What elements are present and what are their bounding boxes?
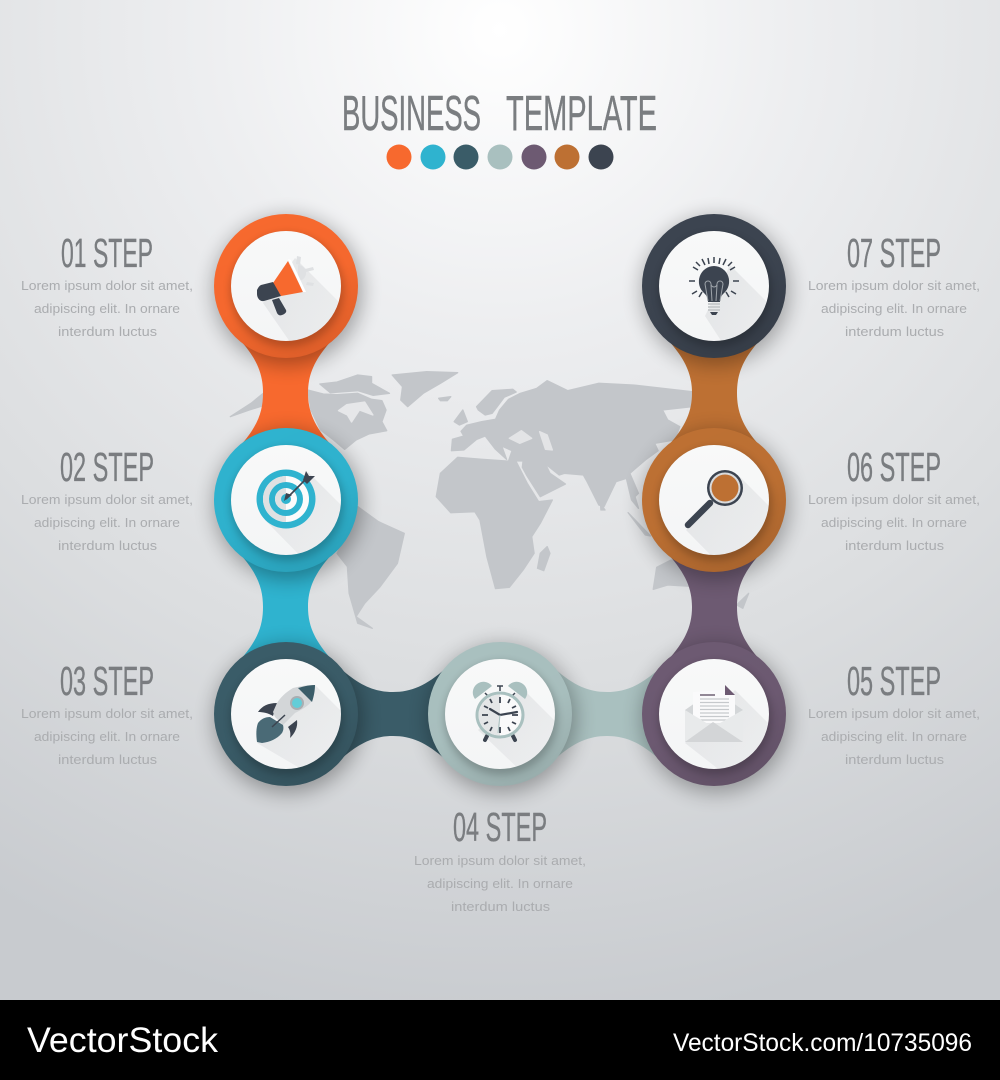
step 04 text: interdum luctus	[451, 899, 551, 914]
node 03 rocket	[214, 642, 375, 793]
africa	[436, 457, 552, 589]
icon: envelope	[685, 685, 743, 742]
step 04 text: Lorem ipsum dolor sit amet,	[414, 853, 586, 868]
footer banner	[0, 1000, 1000, 1080]
step 03 text: Lorem ipsum dolor sit amet,	[21, 706, 193, 721]
node 07 light bulb	[642, 214, 790, 370]
step 06 text: adipiscing elit. In ornare	[821, 515, 967, 530]
hudson bay	[338, 402, 373, 422]
palette dots	[386, 144, 614, 170]
indonesia	[628, 513, 650, 536]
south america	[337, 507, 404, 628]
world map	[230, 372, 749, 628]
australia	[653, 560, 695, 589]
step 02 text: adipiscing elit. In ornare	[34, 515, 180, 530]
step 03 text	[21, 658, 193, 767]
madagascar	[538, 547, 550, 571]
icon: megaphone	[257, 256, 314, 315]
connector: 03 to 04	[340, 668, 446, 760]
icon: rocket	[256, 685, 315, 743]
step 07 text: Lorem ipsum dolor sit amet,	[808, 278, 980, 293]
step 07 text	[808, 230, 980, 339]
step 03 text: interdum luctus	[58, 752, 158, 767]
node 01 megaphone	[214, 214, 365, 378]
title: BUSINESS	[342, 87, 481, 141]
icon: magnifier	[688, 470, 743, 525]
step 06 text: interdum luctus	[845, 538, 945, 553]
step 04 text	[414, 804, 586, 914]
step 04 text: adipiscing elit. In ornare	[427, 876, 573, 891]
step 01 text: adipiscing elit. In ornare	[34, 301, 180, 316]
connector: 02 to 03	[240, 554, 332, 660]
step 02 text: 02 STEP	[60, 444, 154, 490]
node 06 magnifier	[642, 428, 798, 590]
step 01 text: interdum luctus	[58, 324, 158, 339]
inland seas	[509, 431, 552, 450]
step 07 text: interdum luctus	[845, 324, 945, 339]
step 05 text: interdum luctus	[845, 752, 945, 767]
step 04 text: 04 STEP	[453, 804, 547, 850]
step 03 text: adipiscing elit. In ornare	[34, 729, 180, 744]
step 02 text: interdum luctus	[58, 538, 158, 553]
connector: 06 to 07	[668, 340, 760, 446]
british isles	[454, 410, 467, 425]
connector: 01 to 02	[240, 340, 332, 446]
step 01 text: Lorem ipsum dolor sit amet,	[21, 278, 193, 293]
node 02 target	[214, 428, 368, 579]
step 05 text: Lorem ipsum dolor sit amet,	[808, 706, 980, 721]
connector: 05 to 06	[668, 554, 760, 660]
footer banner: VectorStock.com/10735096	[673, 1029, 972, 1057]
step 05 text	[808, 658, 980, 767]
step 01 text: 01 STEP	[61, 230, 153, 276]
title: TEMPLATE	[506, 87, 657, 141]
eurasia	[451, 381, 692, 508]
north america	[308, 390, 387, 449]
step 02 text: Lorem ipsum dolor sit amet,	[21, 492, 193, 507]
step 07 text: adipiscing elit. In ornare	[821, 301, 967, 316]
footer banner: VectorStock	[27, 1021, 219, 1060]
step 06 text	[808, 444, 980, 553]
step 05 text: adipiscing elit. In ornare	[821, 729, 967, 744]
greenland	[392, 372, 458, 407]
icon: target	[256, 470, 316, 528]
scandinavia	[477, 389, 516, 415]
step 03 text: 03 STEP	[60, 658, 154, 704]
iceland	[439, 397, 451, 401]
node 04 alarm clock	[428, 642, 582, 793]
node 05 envelope	[642, 642, 795, 793]
step 01 text	[21, 230, 193, 339]
icon: light bulb	[689, 257, 739, 315]
connector: 04 to 05	[554, 668, 660, 760]
icon: alarm clock	[473, 682, 527, 740]
step 02 text	[21, 444, 193, 553]
step 06 text: Lorem ipsum dolor sit amet,	[808, 492, 980, 507]
new zealand	[737, 593, 749, 608]
